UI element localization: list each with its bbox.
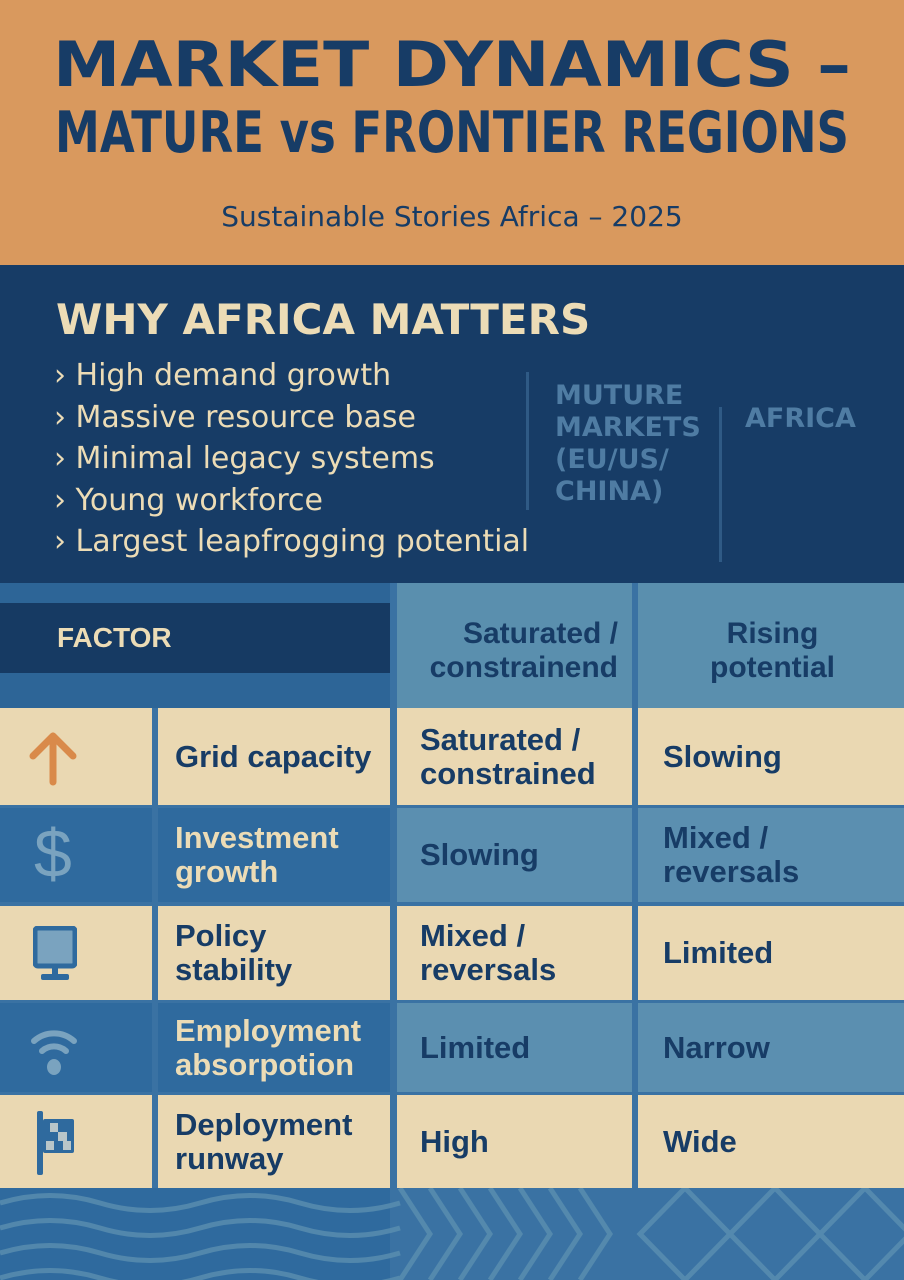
subtitle: Sustainable Stories Africa – 2025 xyxy=(221,200,683,233)
row: deployment runway: High xyxy=(420,1124,489,1158)
bullet list: › Minimal legacy systems xyxy=(54,441,435,476)
icon: monitor xyxy=(33,926,77,980)
row: policy stability: Limited xyxy=(663,935,773,970)
row: investment growth: growth xyxy=(175,854,278,889)
row: employment absorption xyxy=(0,1003,904,1092)
bullet list: › High demand growth xyxy=(54,358,391,393)
table xyxy=(0,583,904,1280)
row: investment growth: Mixed / xyxy=(663,820,768,855)
row: policy stability xyxy=(0,906,904,1000)
row: grid capacity: Grid capacity xyxy=(175,738,371,774)
row: policy stability: Policy xyxy=(175,918,266,953)
row: deployment runway: Wide xyxy=(663,1124,737,1158)
panel: why africa matters xyxy=(0,265,904,583)
header: africa: potential xyxy=(710,651,835,684)
row: deployment runway xyxy=(0,1095,904,1188)
column label: mature markets: CHINA) xyxy=(555,476,663,507)
bottom pattern band xyxy=(0,1188,904,1280)
column label: africa: AFRICA xyxy=(745,403,856,434)
icon: wifi xyxy=(31,1030,77,1075)
header: mature xyxy=(430,617,618,684)
row: deployment runway: runway xyxy=(175,1140,284,1176)
title: MARKET DYNAMICS – xyxy=(53,28,851,101)
bullet list: › Young workforce xyxy=(54,482,323,518)
row: investment growth: reversals xyxy=(663,854,799,889)
title xyxy=(53,28,851,166)
row: employment absorption: Narrow xyxy=(663,1030,770,1064)
row: policy stability: Mixed / xyxy=(420,918,525,953)
column label: mature markets xyxy=(555,380,701,507)
row: policy stability: reversals xyxy=(420,952,556,987)
header row xyxy=(0,583,904,708)
header: africa: Rising xyxy=(727,617,818,650)
header xyxy=(0,0,904,265)
heading: WHY AFRICA MATTERS xyxy=(56,295,590,344)
bullet list: › Largest leapfrogging potential xyxy=(54,524,529,559)
row: employment absorption: Limited xyxy=(420,1030,530,1064)
column label: mature markets: MARKETS xyxy=(555,412,701,443)
row: employment absorption: Employment xyxy=(175,1012,361,1048)
row: grid capacity: Slowing xyxy=(663,738,782,774)
row: grid capacity xyxy=(0,708,904,805)
icon: arrow up xyxy=(30,732,76,786)
column label: mature markets: (EU/US/ xyxy=(555,444,669,475)
icon: flag xyxy=(37,1111,74,1175)
header: mature: constrainend xyxy=(430,651,618,684)
icon: dollar: $ xyxy=(34,816,72,892)
row: investment growth xyxy=(0,808,904,902)
header: mature: Saturated / xyxy=(463,617,618,650)
factor header: FACTOR xyxy=(57,622,172,653)
row: deployment runway: Deployment xyxy=(175,1106,352,1142)
row: grid capacity: constrained xyxy=(420,756,596,790)
title: MATURE vs FRONTIER REGIONS xyxy=(55,100,849,166)
row: policy stability: stability xyxy=(175,952,292,987)
header: africa xyxy=(710,617,835,684)
row: grid capacity: Saturated / xyxy=(420,722,580,756)
row: investment growth: Investment xyxy=(175,820,339,855)
row: investment growth: Slowing xyxy=(420,837,539,872)
factor header xyxy=(0,603,390,673)
bullet list xyxy=(54,358,529,559)
column label: mature markets: MUTURE xyxy=(555,380,683,411)
bullet list: › Massive resource base xyxy=(54,400,416,434)
row: employment absorption: absorpotion xyxy=(175,1046,354,1082)
